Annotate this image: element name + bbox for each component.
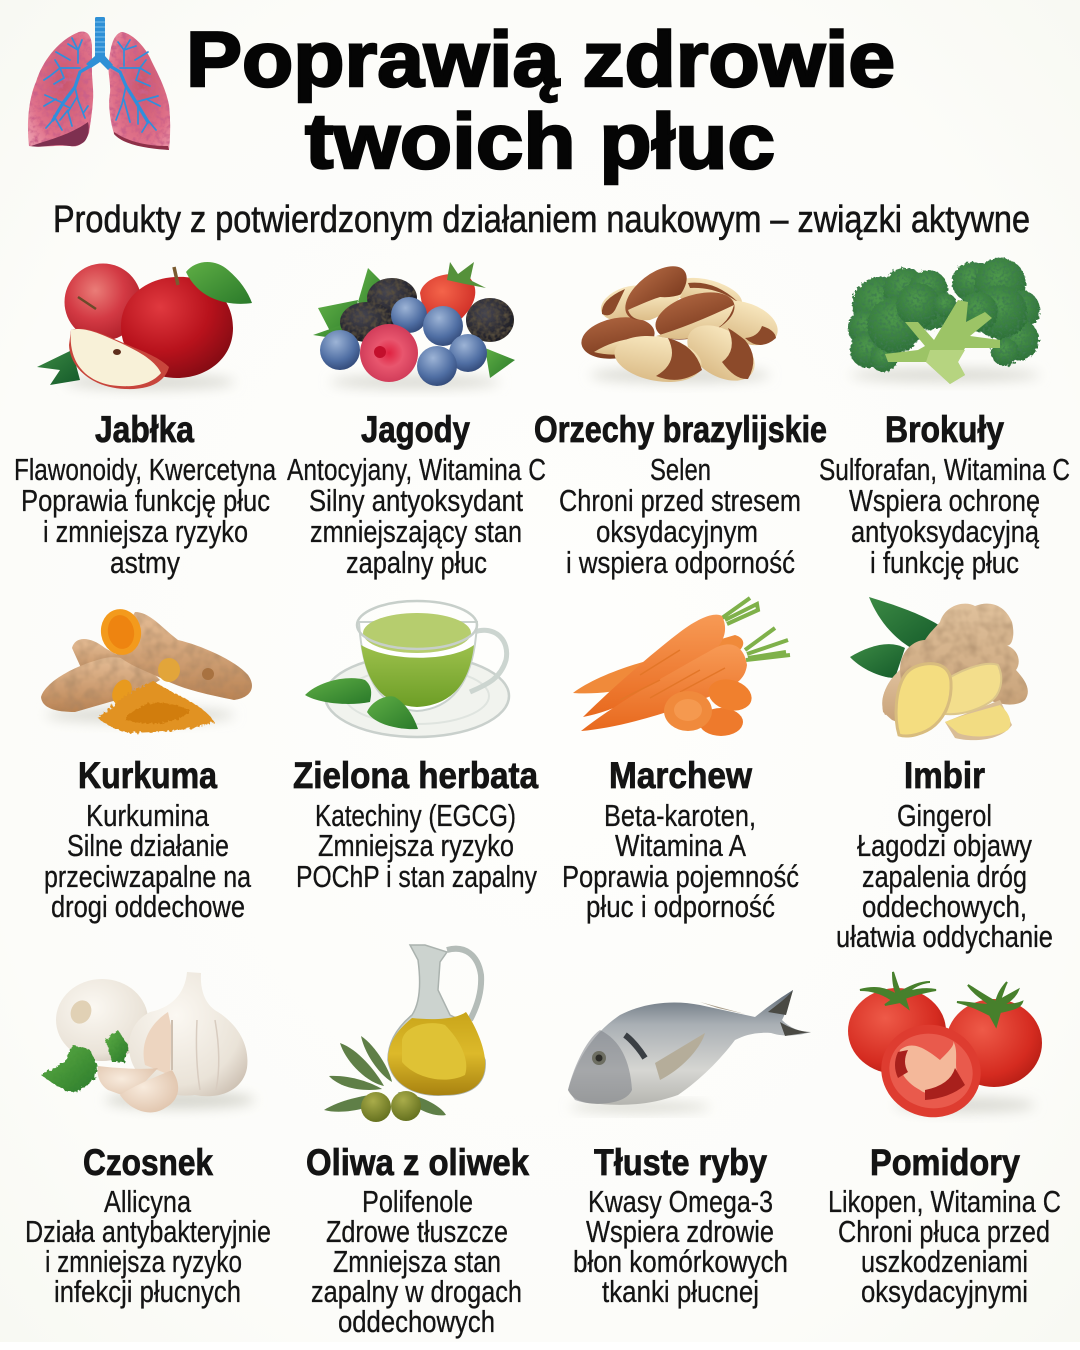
panel: Jagody xyxy=(287,262,546,580)
panel: Zielona herbata xyxy=(293,601,538,894)
heading: Marchew xyxy=(609,755,752,796)
text block: Witamina A xyxy=(615,828,746,863)
text block: uszkodzeniami xyxy=(861,1244,1028,1279)
heading: Orzechy brazylijskie xyxy=(534,409,827,450)
text block: tkanki płucnej xyxy=(602,1274,759,1309)
text block xyxy=(573,1184,788,1309)
text block xyxy=(819,452,1070,580)
text block xyxy=(296,798,537,894)
text block xyxy=(311,1184,522,1339)
text block: zapalenia dróg xyxy=(862,859,1027,894)
text block: oddechowych, xyxy=(862,889,1027,924)
icon: garlic xyxy=(41,972,255,1112)
heading: Jabłka xyxy=(95,409,194,450)
text block: Selen xyxy=(650,452,711,487)
panel: Imbir xyxy=(836,597,1053,954)
icon: carrots xyxy=(573,598,790,736)
icon: berries xyxy=(313,262,515,389)
text block: oddechowych xyxy=(338,1304,495,1339)
heading: Czosnek xyxy=(83,1142,213,1183)
text block xyxy=(836,798,1053,954)
text block: i zmniejsza ryzyko xyxy=(45,1244,242,1279)
panel: Brokuły xyxy=(819,258,1070,580)
icon: brazil nuts xyxy=(578,256,784,392)
heading: Jagody xyxy=(361,409,470,450)
text block: oksydacyjnym xyxy=(596,514,758,549)
text block: Beta-karoten, xyxy=(604,798,756,833)
text block: i wspiera odporność xyxy=(566,545,795,580)
icon: olive oil jug xyxy=(324,945,485,1122)
text block: Działa antybakteryjnie xyxy=(25,1214,271,1249)
text block: Wspiera zdrowie xyxy=(586,1214,774,1249)
heading: Tłuste ryby xyxy=(594,1142,767,1183)
text block: drogi oddechowe xyxy=(51,889,245,924)
text block: Allicyna xyxy=(104,1184,192,1219)
heading: Brokuły xyxy=(885,409,1004,450)
text block: astmy xyxy=(110,545,180,580)
text block: antyoksydacyjną xyxy=(851,514,1040,549)
icon: lungs xyxy=(28,17,170,150)
heading: Imbir xyxy=(904,755,985,796)
text block: Gingerol xyxy=(897,798,992,833)
icon: apples xyxy=(37,262,252,390)
text block: przeciwzapalne na xyxy=(44,859,252,894)
text block: Zdrowe tłuszcze xyxy=(326,1214,508,1249)
text block xyxy=(25,1184,271,1309)
text block: Chroni przed stresem xyxy=(559,483,801,518)
icon: green tea xyxy=(305,601,509,737)
text block: oksydacyjnymi xyxy=(861,1274,1028,1309)
text block: Poprawia pojemność xyxy=(562,859,799,894)
text block xyxy=(559,452,801,580)
heading: Kurkuma xyxy=(78,755,217,796)
heading: Pomidory xyxy=(870,1142,1020,1183)
text block xyxy=(287,452,546,580)
text block: Kurkumina xyxy=(86,798,210,833)
icon: fish xyxy=(568,990,811,1112)
panel: Tłuste ryby xyxy=(568,990,811,1309)
text block: Łagodzi objawy xyxy=(857,828,1032,863)
text block: Wspiera ochronę xyxy=(849,483,1040,518)
text block: Silny antyoksydant xyxy=(309,483,523,518)
text block: Zmniejsza stan xyxy=(333,1244,501,1279)
title xyxy=(186,15,895,185)
text block xyxy=(562,798,799,924)
text block xyxy=(14,452,277,580)
text block: Antocyjany, Witamina C xyxy=(287,452,546,487)
panel: Jabłka xyxy=(14,262,277,580)
text block: zmniejszający stan xyxy=(310,514,522,549)
text block: Flawonoidy, Kwercetyna xyxy=(14,452,277,487)
panel: Kurkuma xyxy=(41,606,252,924)
text block: zapalny płuc xyxy=(346,545,487,580)
text block: i zmniejsza ryzyko xyxy=(43,514,248,549)
text block: Kwasy Omega-3 xyxy=(588,1184,773,1219)
title: Poprawią zdrowie xyxy=(186,15,895,103)
heading: Zielona herbata xyxy=(293,755,538,796)
text block: Poprawia funkcję płuc xyxy=(21,483,270,518)
icon: ginger xyxy=(850,597,1028,740)
text block: Zmniejsza ryzyko xyxy=(318,828,514,863)
icon: turmeric xyxy=(41,606,252,733)
panel: Orzechy brazylijskie xyxy=(534,256,827,580)
text block: płuc i odporność xyxy=(586,889,775,924)
text block: POChP i stan zapalny xyxy=(296,859,537,894)
text block xyxy=(828,1184,1061,1309)
panel: Czosnek xyxy=(25,972,271,1309)
text block: Katechiny (EGCG) xyxy=(315,798,516,833)
text block: zapalny w drogach xyxy=(311,1274,522,1309)
text block xyxy=(44,798,252,924)
text block: Polifenole xyxy=(362,1184,473,1219)
text block: infekcji płucnych xyxy=(54,1274,241,1309)
panel: Marchew xyxy=(562,598,799,924)
panel: Oliwa z oliwek xyxy=(306,945,529,1339)
icon: tomatoes xyxy=(848,972,1042,1128)
panel: Pomidory xyxy=(828,972,1061,1309)
heading: Oliwa z oliwek xyxy=(306,1142,529,1183)
text block: i funkcję płuc xyxy=(870,545,1019,580)
text block: Silne działanie xyxy=(67,828,229,863)
text block: błon komórkowych xyxy=(573,1244,788,1279)
title: twoich płuc xyxy=(305,97,775,185)
icon: broccoli xyxy=(848,258,1040,384)
